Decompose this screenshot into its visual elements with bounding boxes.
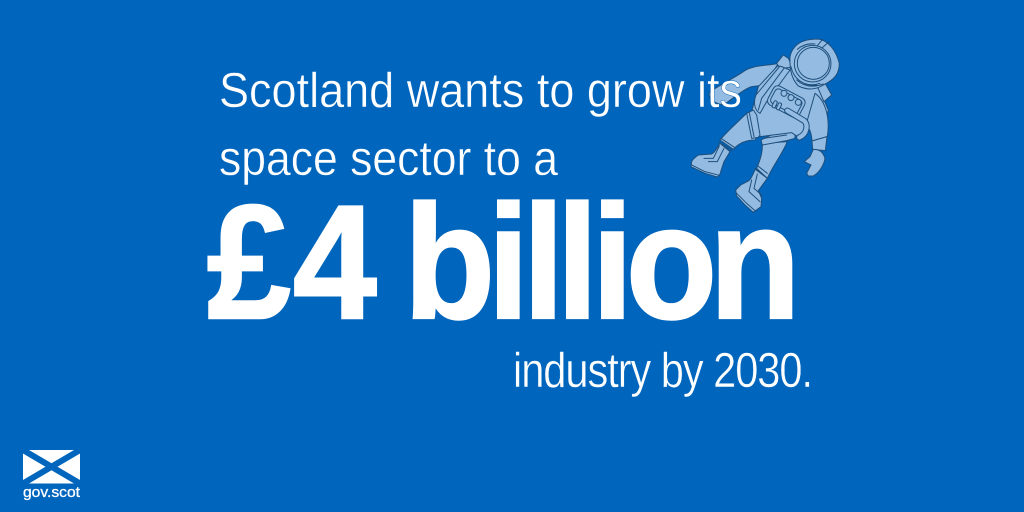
closing line: industry by 2030. [513,344,812,398]
heading line 1: Scotland wants to grow its [219,64,742,118]
big figure: billion: billion [404,171,800,352]
icon: saltire flag [23,450,80,484]
big figure: pound four: £4 [207,172,377,353]
big figure: £4 billion [207,171,800,353]
logo wordmark: gov.scot [23,485,80,501]
logo: gov.scot [23,450,80,501]
icon: astronaut [691,39,839,212]
heading line 2: space sector to a [219,132,559,186]
